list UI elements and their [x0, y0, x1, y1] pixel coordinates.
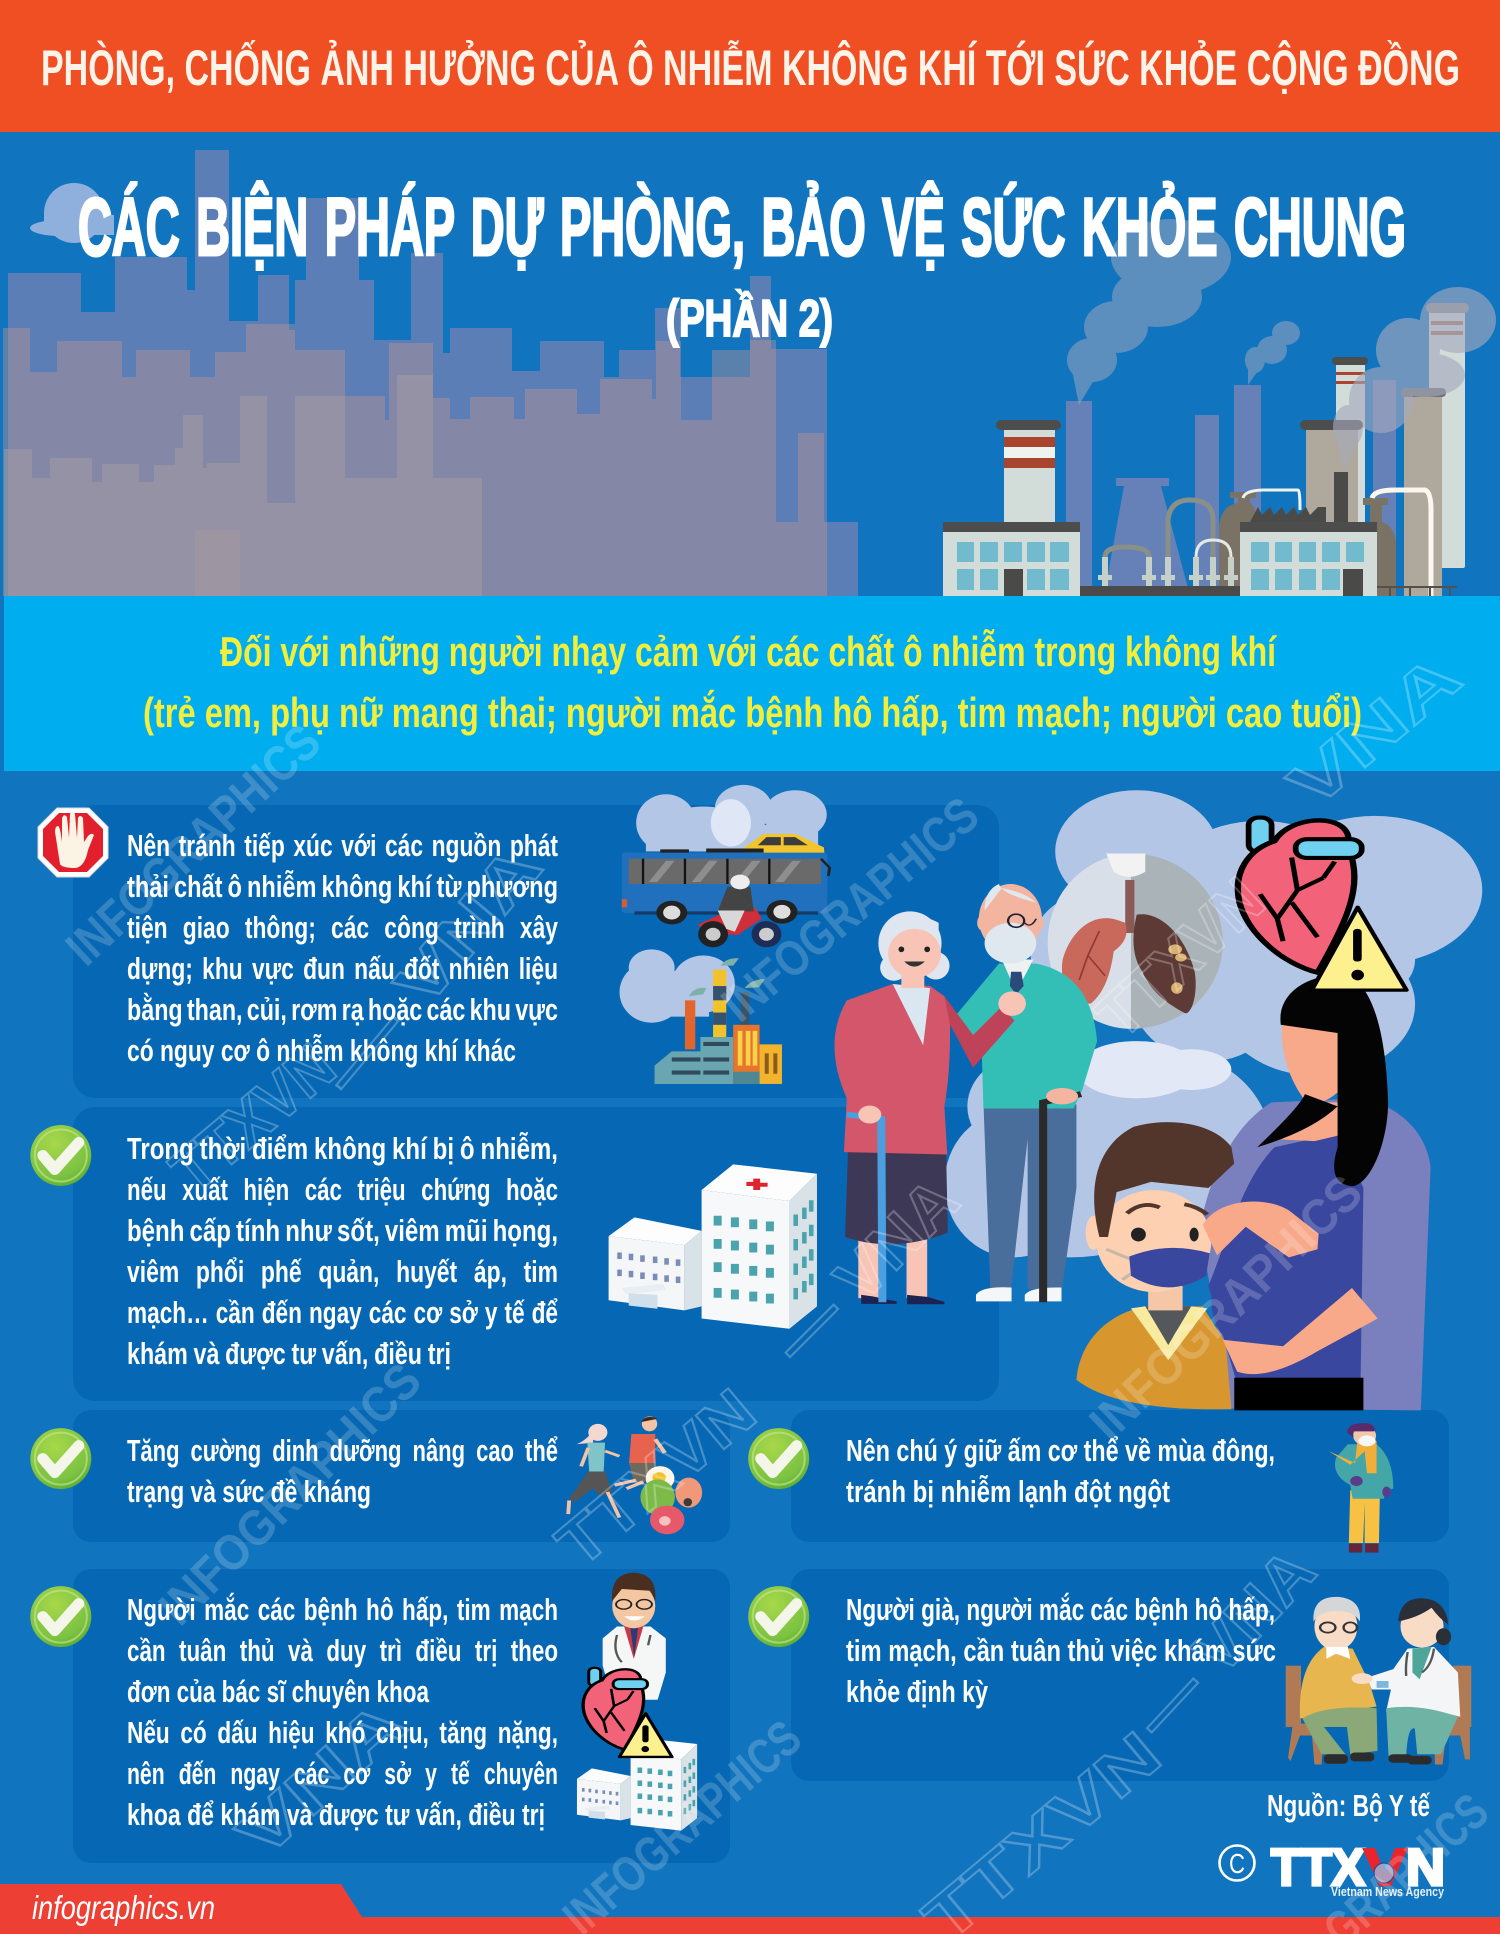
- icon: check nutrition: [30, 1428, 91, 1489]
- illustration: mini hospital: [577, 1739, 697, 1831]
- light chimney: [1332, 357, 1368, 596]
- city skyline illustration: [3, 150, 858, 596]
- watermarks: TTXVN: [1082, 863, 1278, 1052]
- watermarks: — VNA: [308, 831, 556, 1107]
- watermarks: INFOGRAPHICS: [148, 1352, 432, 1636]
- text: follow treatment: khoa để khám và được tư vấn, điều trị: [127, 1797, 545, 1832]
- copyright mark: [1220, 1846, 1254, 1880]
- illustration: senior check-up: [1286, 1597, 1471, 1764]
- brick chimney: [996, 420, 1061, 522]
- lungs medallion: [1048, 853, 1223, 1029]
- audience band: [4, 596, 1500, 771]
- text: avoid pollution sources: thải chất ô nhiễm không khí từ phương: [127, 869, 558, 904]
- icon: check warm: [748, 1428, 809, 1489]
- text: follow treatment: nên đến ngay các cơ sở y tế chuyên: [127, 1756, 558, 1791]
- text: seek medical care: bệnh cấp tính như sốt, viêm mũi họng,: [127, 1213, 558, 1248]
- text: seek medical care: viêm phổi phế quản, huyết áp, tim: [127, 1254, 558, 1289]
- illustration: winter clothing person: [1329, 1423, 1393, 1553]
- text: follow treatment: đơn của bác sĩ chuyên khoa: [127, 1674, 430, 1709]
- logo: TTXVN: Vietnam News Agency: [1331, 1885, 1444, 1899]
- text: nutrition: trạng và sức đề kháng: [127, 1474, 371, 1509]
- watermarks: — VNA: [759, 1163, 973, 1377]
- cloud top left: [30, 183, 114, 243]
- text: keep warm: tránh bị nhiễm lạnh đột ngột: [846, 1474, 1170, 1509]
- panel: avoid sources: [73, 805, 999, 1098]
- text: avoid pollution sources: dựng; khu vực đun nấu đốt nhiên liệu: [127, 951, 558, 986]
- header bar: [0, 0, 1500, 132]
- elderly woman's arm and hand: [944, 991, 1026, 1068]
- logo: TTXVN: V: [1364, 1839, 1406, 1897]
- text: seek medical care: mạch… cần đến ngay các cơ sở y tế để: [127, 1295, 558, 1330]
- illustration: traffic pollution: [622, 785, 830, 947]
- text: follow treatment: [127, 1591, 558, 1832]
- watermarks: VNA: [223, 1685, 420, 1872]
- logo: TTXVN: TTX: [1271, 1839, 1365, 1897]
- heart: [1238, 818, 1362, 973]
- text: avoid pollution sources: tiện giao thông; các công trình xây: [127, 910, 559, 945]
- text: keep warm: Nên chú ý giữ ấm cơ thể về mùa đông,: [846, 1433, 1275, 1468]
- text: avoid pollution sources: [127, 828, 559, 1068]
- text: follow treatment: Người mắc các bệnh hô hấp, tim mạch: [127, 1591, 558, 1627]
- logo: TTXVN: N: [1406, 1839, 1445, 1897]
- text: avoid pollution sources: có nguy cơ ô nhiễm không khí khác: [127, 1033, 516, 1068]
- text: seek medical care: khám và được tư vấn, điều trị: [127, 1336, 451, 1371]
- factory building left: [943, 522, 1080, 596]
- clouds behind people: [944, 790, 1482, 1257]
- illustration: runners and food: [568, 1416, 702, 1534]
- woman's arms and belly: [1203, 1201, 1378, 1374]
- text: periodic checkups: tim mạch, cần tuân thủ việc khám sức: [846, 1633, 1276, 1668]
- illustration: sensitive people group: [835, 790, 1482, 1410]
- factory building right: [1240, 472, 1377, 596]
- illustration: doctor: [603, 1573, 666, 1700]
- panel: treatment: [73, 1569, 730, 1863]
- factory illustration: [943, 219, 1496, 596]
- pregnant woman: [1200, 975, 1431, 1410]
- elderly man: [955, 884, 1097, 1302]
- subtitle: (PHẦN 2): [666, 289, 833, 348]
- text: seek medical care: Trong thời điểm không khí bị ô nhiễm,: [127, 1131, 558, 1166]
- watermarks: INFOGRAPHICS: [1079, 1164, 1373, 1451]
- text: avoid pollution sources: bằng than, củi, rơm rạ hoặc các khu vực: [127, 991, 558, 1027]
- panel: seek care: [73, 1107, 999, 1401]
- elderly woman body: [835, 911, 950, 1304]
- warning triangle: [1312, 907, 1406, 990]
- text: seek medical care: nếu xuất hiện các triệu chứng hoặc: [127, 1172, 558, 1207]
- logo: TTXVN: [1271, 1839, 1445, 1899]
- text: periodic checkups: khỏe định kỳ: [846, 1674, 989, 1709]
- watermarks: [55, 639, 1499, 1934]
- copyright mark: C: [1229, 1848, 1245, 1879]
- tall right chimney: [1426, 303, 1469, 568]
- icon: check treatment: [30, 1586, 91, 1647]
- boy with mask: [1076, 1122, 1234, 1409]
- illustration: mini heart: [583, 1668, 647, 1749]
- website label: infographics.vn: [32, 1889, 215, 1926]
- watermarks: — VNA: [1120, 1534, 1329, 1752]
- icon: check checkups: [748, 1586, 809, 1647]
- icon: stop hand: [38, 808, 108, 877]
- text: keep warm: [846, 1433, 1275, 1509]
- illustration: hospital: [609, 1164, 817, 1329]
- watermarks: VNA: [1275, 639, 1474, 823]
- text: periodic checkups: Người già, người mắc các bệnh hô hấp,: [846, 1591, 1275, 1627]
- chimney smoke: [1067, 219, 1300, 405]
- tanks and pipes: [1080, 490, 1457, 596]
- brown chimneys: [1300, 388, 1446, 596]
- grey smoke on the right: [1333, 287, 1496, 472]
- watermarks: INFOGRAPHICS: [55, 713, 331, 976]
- text: seek medical care: [127, 1131, 558, 1371]
- text: avoid pollution sources: Nên tránh tiếp xúc với các nguồn phát: [127, 828, 558, 863]
- panel: keep warm: [791, 1410, 1449, 1542]
- text: follow treatment: cần tuân thủ và duy trì điều trị theo: [127, 1633, 558, 1668]
- icon: check nutrition-care: [30, 1125, 91, 1186]
- background chimneys: [1066, 380, 1396, 596]
- text: periodic checkups: [846, 1591, 1276, 1709]
- footer bar: [0, 1884, 1500, 1934]
- watermarks: TTXVN: [543, 1375, 769, 1581]
- text: nutrition: Tăng cường dinh dưỡng nâng cao thể: [127, 1433, 558, 1468]
- text: nutrition: [127, 1433, 558, 1509]
- illustration: mini warning: [619, 1713, 672, 1757]
- panel: nutrition: [73, 1410, 730, 1542]
- text: follow treatment: Nếu có dấu hiệu khó chịu, tăng nặng,: [127, 1715, 558, 1750]
- source credit: Nguồn: Bộ Y tế: [1267, 1788, 1431, 1823]
- panel: checkups: [791, 1569, 1449, 1781]
- watermarks: TTXVN: [157, 1029, 349, 1207]
- illustration: industrial pollution: [620, 949, 782, 1084]
- watermarks: INFOGRAPHICS: [711, 786, 989, 1032]
